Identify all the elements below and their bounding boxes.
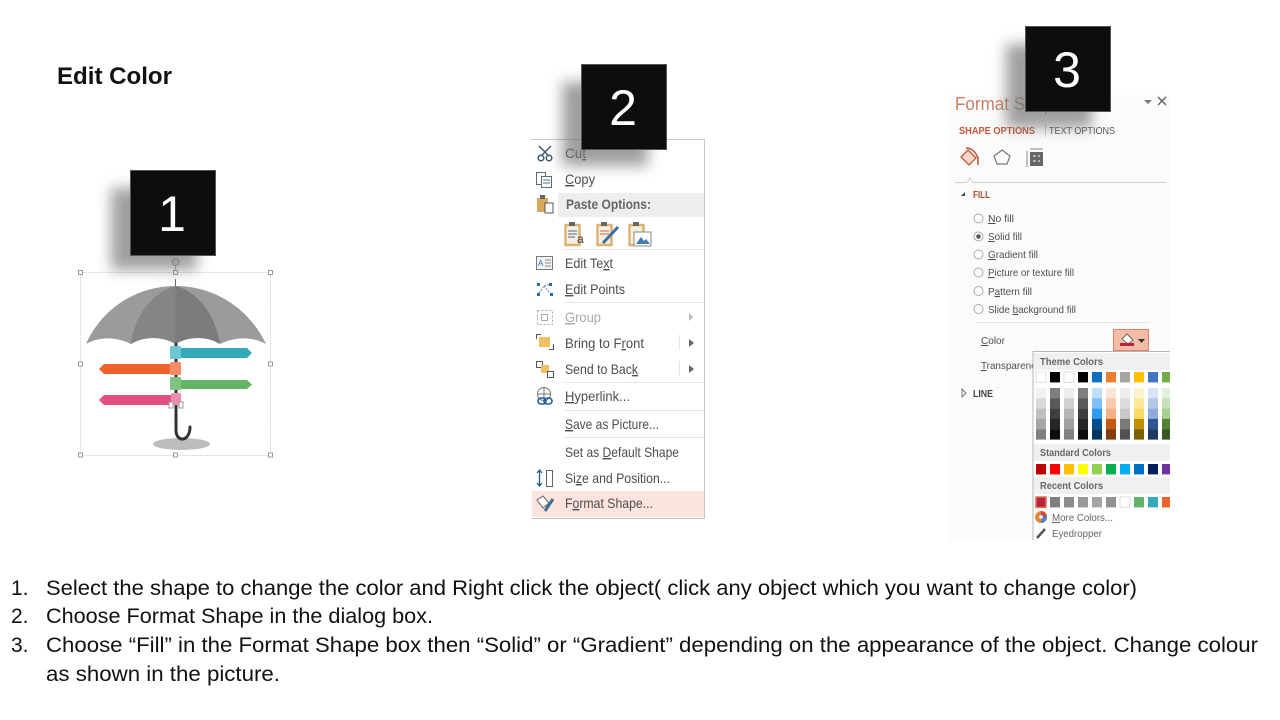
- menu labels: Save as Picture...: [565, 416, 659, 432]
- icon: edit text: [536, 256, 552, 270]
- menu labels: [565, 145, 679, 511]
- icon: size properties: [1027, 149, 1043, 167]
- menu labels: Hyperlink...: [565, 388, 630, 404]
- fill radio options: Pattern fill: [988, 286, 1032, 298]
- badge 1: [111, 170, 216, 270]
- icon: copy: [536, 172, 552, 188]
- color and transparency labels: [981, 336, 1032, 372]
- icon: format shape: [537, 496, 553, 511]
- icon: paste option keep text: [566, 222, 584, 246]
- menu labels: Set as Default Shape: [565, 444, 679, 460]
- icon: more colors wheel: [1035, 511, 1047, 523]
- icon: size and position: [537, 470, 552, 486]
- fill section heading: FILL: [973, 190, 990, 201]
- icon: umbrella canopy: [86, 279, 266, 344]
- recent colors heading: Recent Colors: [1040, 480, 1103, 492]
- arrow: orange: [99, 362, 181, 375]
- icon: edit text: A: [538, 259, 544, 268]
- arrow: teal: [170, 346, 252, 359]
- icon: eyedropper: [1037, 529, 1045, 538]
- badge 2: 2: [609, 80, 637, 136]
- panel: context menu: [531, 139, 705, 519]
- title: Edit Color: [57, 63, 172, 90]
- badge 2: [562, 64, 666, 166]
- icon: fill bucket: [961, 148, 978, 165]
- instructions list: as shown in the picture.: [46, 663, 280, 686]
- badge 3: 3: [1053, 42, 1081, 98]
- arrow: pink: [99, 393, 183, 408]
- icon: scissors: [538, 146, 552, 161]
- icon: paste option picture: [630, 222, 651, 246]
- instructions list: [11, 577, 1258, 686]
- fill radio options: Picture or texture fill: [988, 267, 1074, 279]
- fill radio options: Solid fill: [988, 231, 1022, 243]
- pane tabs: SHAPE OPTIONS: [959, 125, 1035, 137]
- theme color shades: [1036, 388, 1172, 440]
- panel: umbrella selected shape: [78, 258, 272, 457]
- menu labels: Format Shape...: [565, 495, 653, 511]
- icon: effects pentagon: [994, 150, 1010, 164]
- pane window controls: [1144, 97, 1166, 105]
- menu labels: Size and Position...: [565, 470, 670, 486]
- instructions list: 3.: [11, 634, 29, 657]
- fill radio options: Slide background fill: [988, 304, 1076, 316]
- color picker button: [1114, 330, 1148, 350]
- pane divider: [955, 178, 1166, 182]
- menu labels: Group: [565, 309, 601, 325]
- fill radio options: [974, 213, 1076, 316]
- icon: edit points: [537, 283, 553, 296]
- icon: umbrella handle: [176, 344, 190, 439]
- instructions list: Choose “Fill” in the Format Shape box then “Solid” or “Gradient” depending on the appearance of the object. Change colour: [46, 634, 1258, 657]
- pane tabs: TEXT OPTIONS: [1049, 125, 1115, 137]
- more colors link: More Colors...: [1052, 512, 1113, 524]
- pane tabs: [959, 123, 1115, 137]
- line section heading: [962, 389, 993, 400]
- submenu arrows: [689, 313, 694, 373]
- pane heading: Format Shape: [955, 94, 1063, 114]
- theme color row: [1036, 372, 1172, 382]
- menu labels: Bring to Front: [565, 335, 644, 351]
- standard colors heading: Standard Colors: [1040, 447, 1111, 459]
- instructions list: Choose Format Shape in the dialog box.: [46, 605, 433, 628]
- color and transparency labels: Color: [981, 335, 1005, 347]
- menu labels: Copy: [565, 171, 595, 187]
- selection box: [78, 258, 272, 457]
- icon: umbrella ground shadow: [153, 438, 210, 450]
- fill radio options: No fill: [988, 213, 1014, 225]
- standard color row: [1036, 464, 1172, 474]
- icon: group: [538, 310, 552, 324]
- menu labels: Send to Back: [565, 361, 639, 377]
- recent color row: [1036, 497, 1172, 507]
- menu labels: Edit Points: [565, 281, 625, 297]
- theme colors heading: Theme Colors: [1040, 356, 1103, 368]
- arrow: green: [170, 377, 252, 390]
- icon: hyperlink: [538, 388, 552, 404]
- icon: paste option brush: [598, 222, 618, 245]
- fill radio options: Gradient fill: [988, 249, 1038, 261]
- color and transparency labels: Transparency: [981, 360, 1042, 372]
- instructions list: Select the shape to change the color and Right click the object( click any object which you want to change color): [46, 577, 1137, 600]
- icon: paste option keep text: a: [577, 232, 584, 246]
- eyedropper label: Eyedropper: [1052, 528, 1102, 540]
- menu labels: Paste Options:: [566, 196, 651, 212]
- fill section heading: [961, 191, 990, 198]
- instructions list: 2.: [11, 605, 29, 628]
- menu labels: Edit Text: [565, 255, 613, 271]
- menu labels: Cut: [565, 145, 586, 161]
- panel: format shape pane: [949, 94, 1173, 542]
- badge 3: [1006, 26, 1110, 128]
- badge 1: 1: [158, 186, 186, 242]
- line section heading: LINE: [973, 389, 993, 400]
- color picker popup: [1033, 352, 1173, 542]
- icon: send to back: [536, 362, 554, 378]
- icon: bring to front: [536, 334, 554, 350]
- icon: paste: [537, 195, 553, 213]
- instructions list: 1.: [11, 577, 29, 600]
